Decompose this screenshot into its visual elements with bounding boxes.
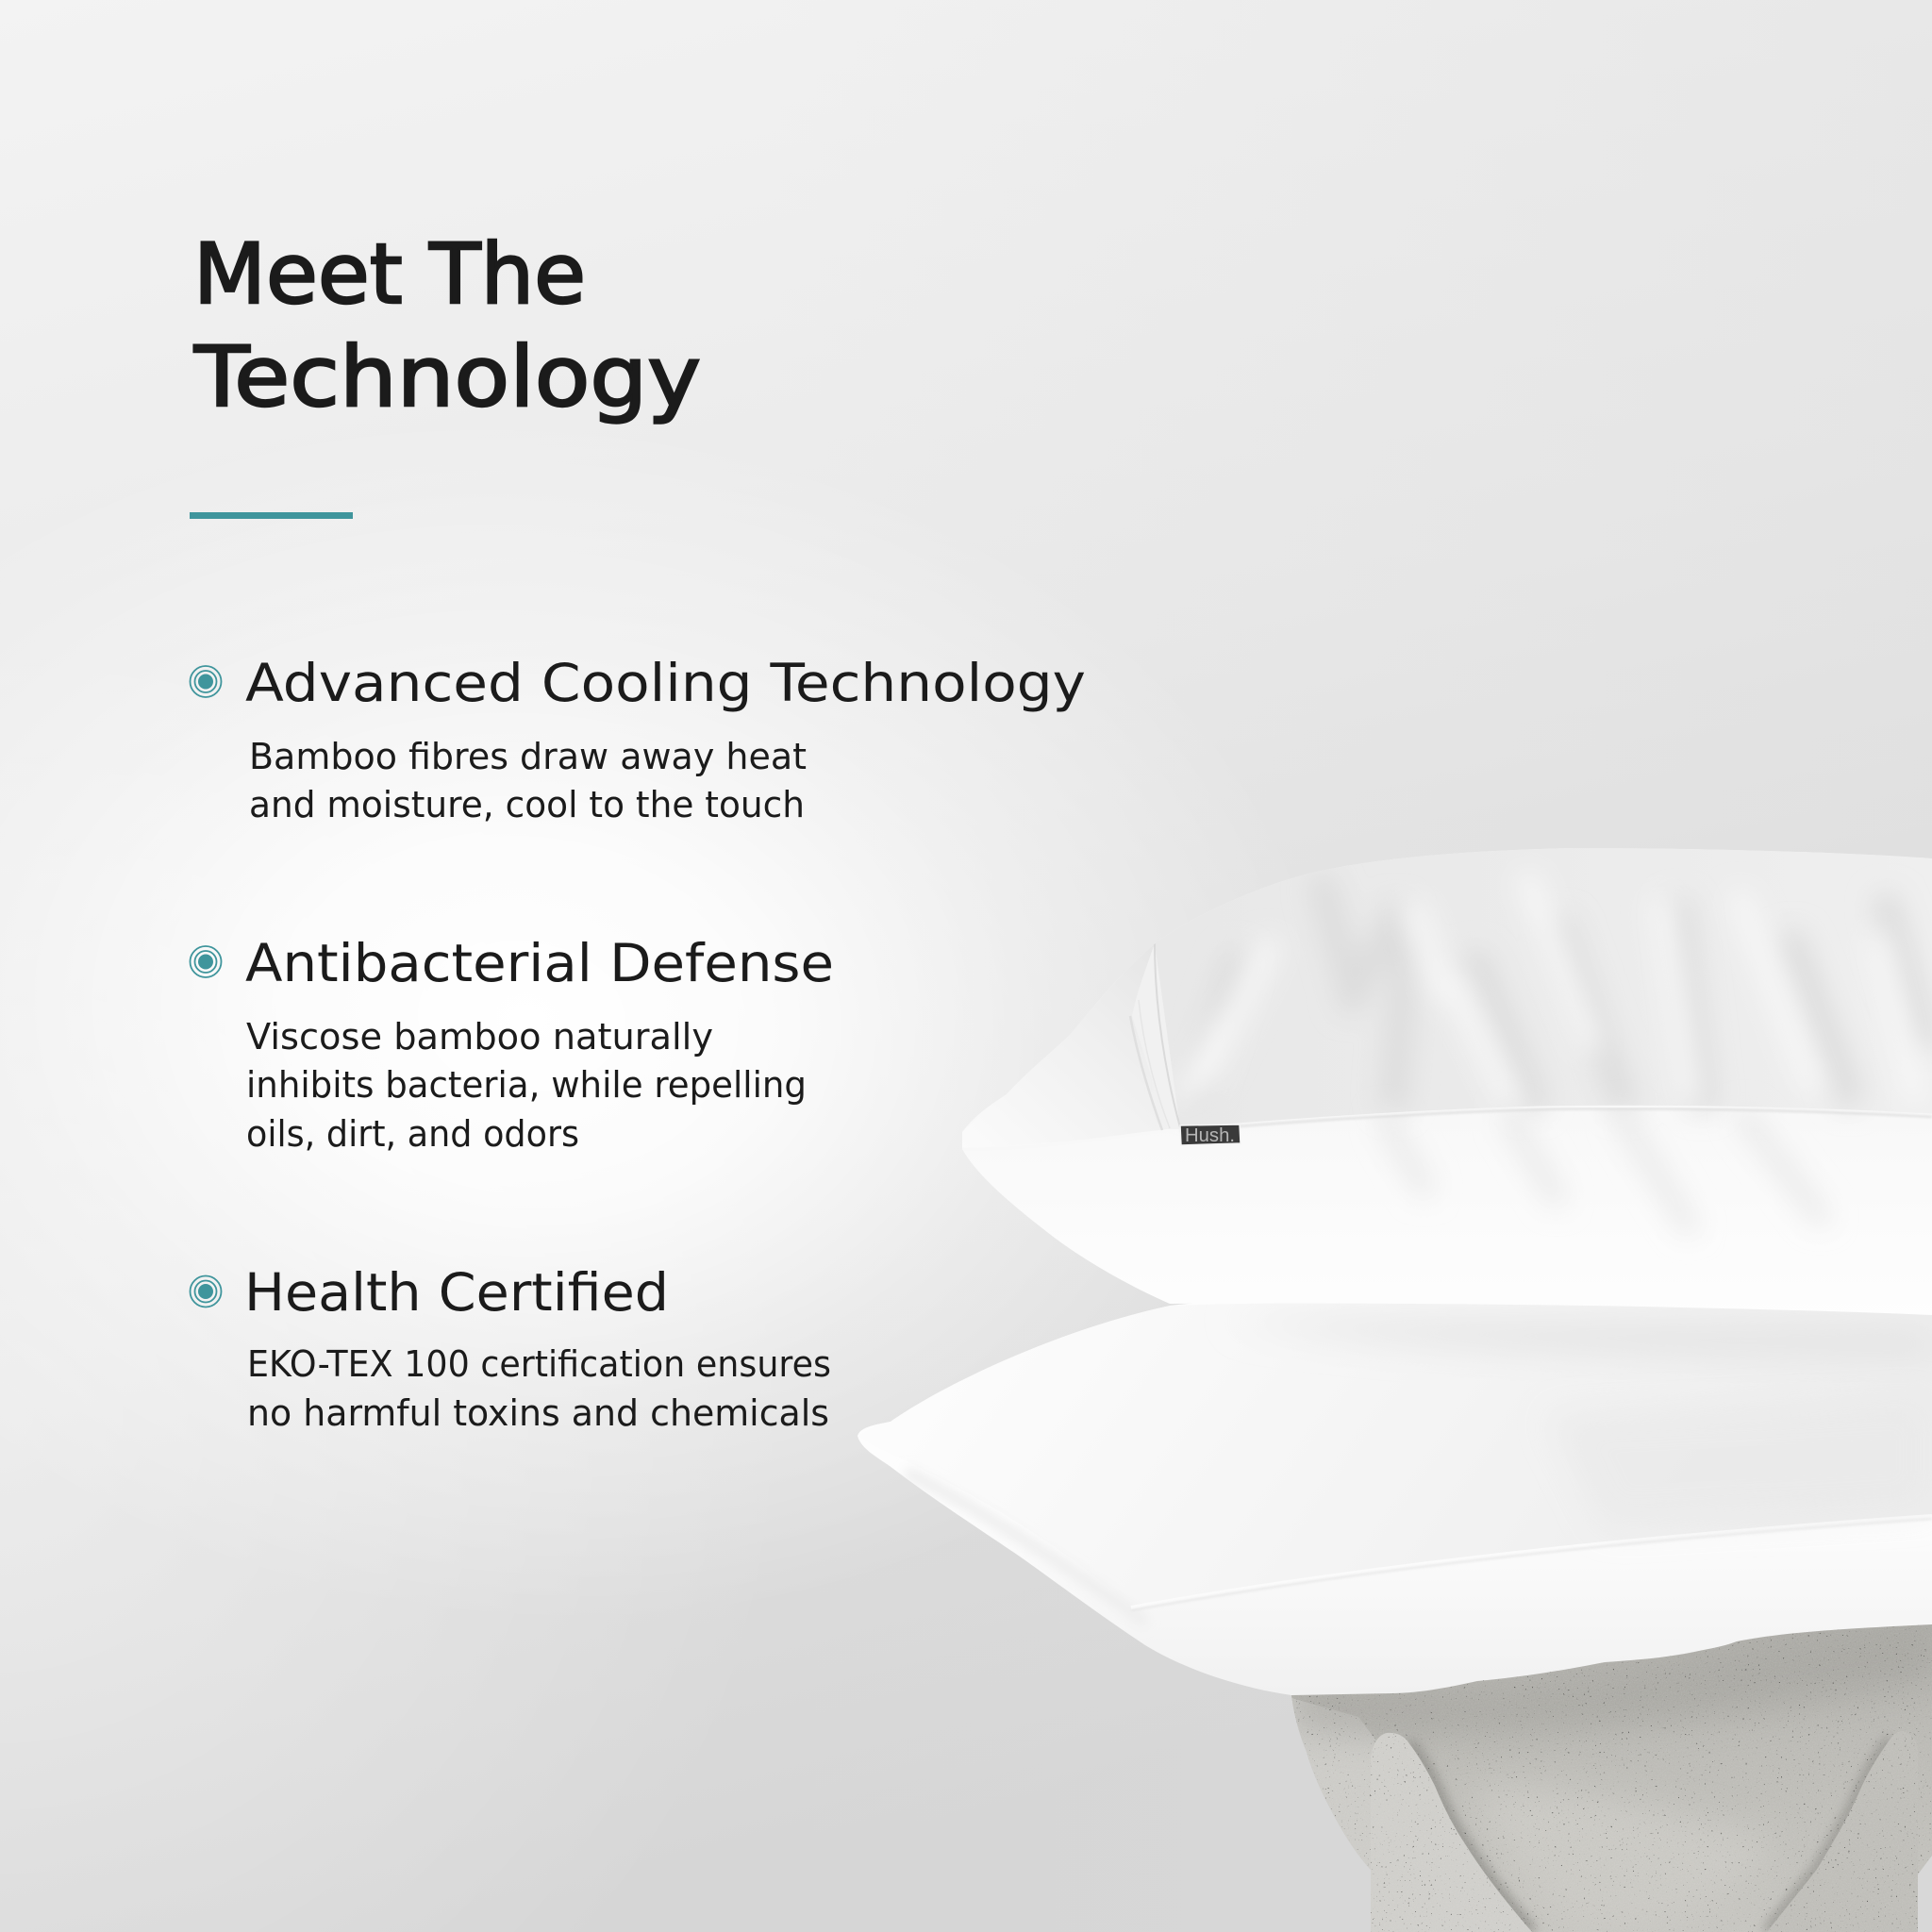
photo: stone stool [1291,1624,1932,1932]
icon: target bullet [191,946,221,977]
stool left leg [1371,1733,1532,1932]
heading: Antibacterial Defense [245,933,834,993]
feature: antibacterial [191,933,834,1155]
description: Viscose bamboo naturally [246,1016,713,1058]
description: EKO-TEX 100 certification ensures [247,1343,831,1385]
description [246,1016,807,1155]
icon: target bullet [191,666,221,697]
pillow upper panel [1155,848,1932,1129]
heading: Health Certified [244,1262,669,1323]
feature: health certified [191,1262,831,1434]
photo: top pillow [943,840,1932,1330]
pillow flap edge [1130,943,1180,1130]
stool right leg [1761,1736,1891,1932]
description: oils, dirt, and odors [246,1113,579,1155]
pillow seam [1131,1516,1932,1607]
pillow seam [1165,1106,1932,1130]
description: Bamboo fibres draw away heat [249,736,807,777]
description [249,736,807,825]
bowl light patch [1496,1796,1728,1877]
accent rule [190,512,353,519]
fold shadows [1193,887,1924,1099]
description: inhibits bacteria, while repelling [246,1064,807,1106]
feature: advanced cooling [191,653,1086,825]
description [247,1343,831,1434]
pillow upper panel [1281,1305,1932,1558]
title [193,225,701,425]
heading: Advanced Cooling Technology [245,653,1086,713]
underside shading [909,1472,1097,1589]
icon: target bullet [191,1275,221,1307]
photo: bottom pillow [849,1283,1932,1707]
product tag: Hush. [1185,1125,1235,1146]
pillow ear [1092,945,1160,1108]
description: no harmful toxins and chemicals [247,1392,829,1434]
title: Meet The [193,225,586,323]
title: Technology [193,328,701,425]
description: and moisture, cool to the touch [249,784,805,825]
